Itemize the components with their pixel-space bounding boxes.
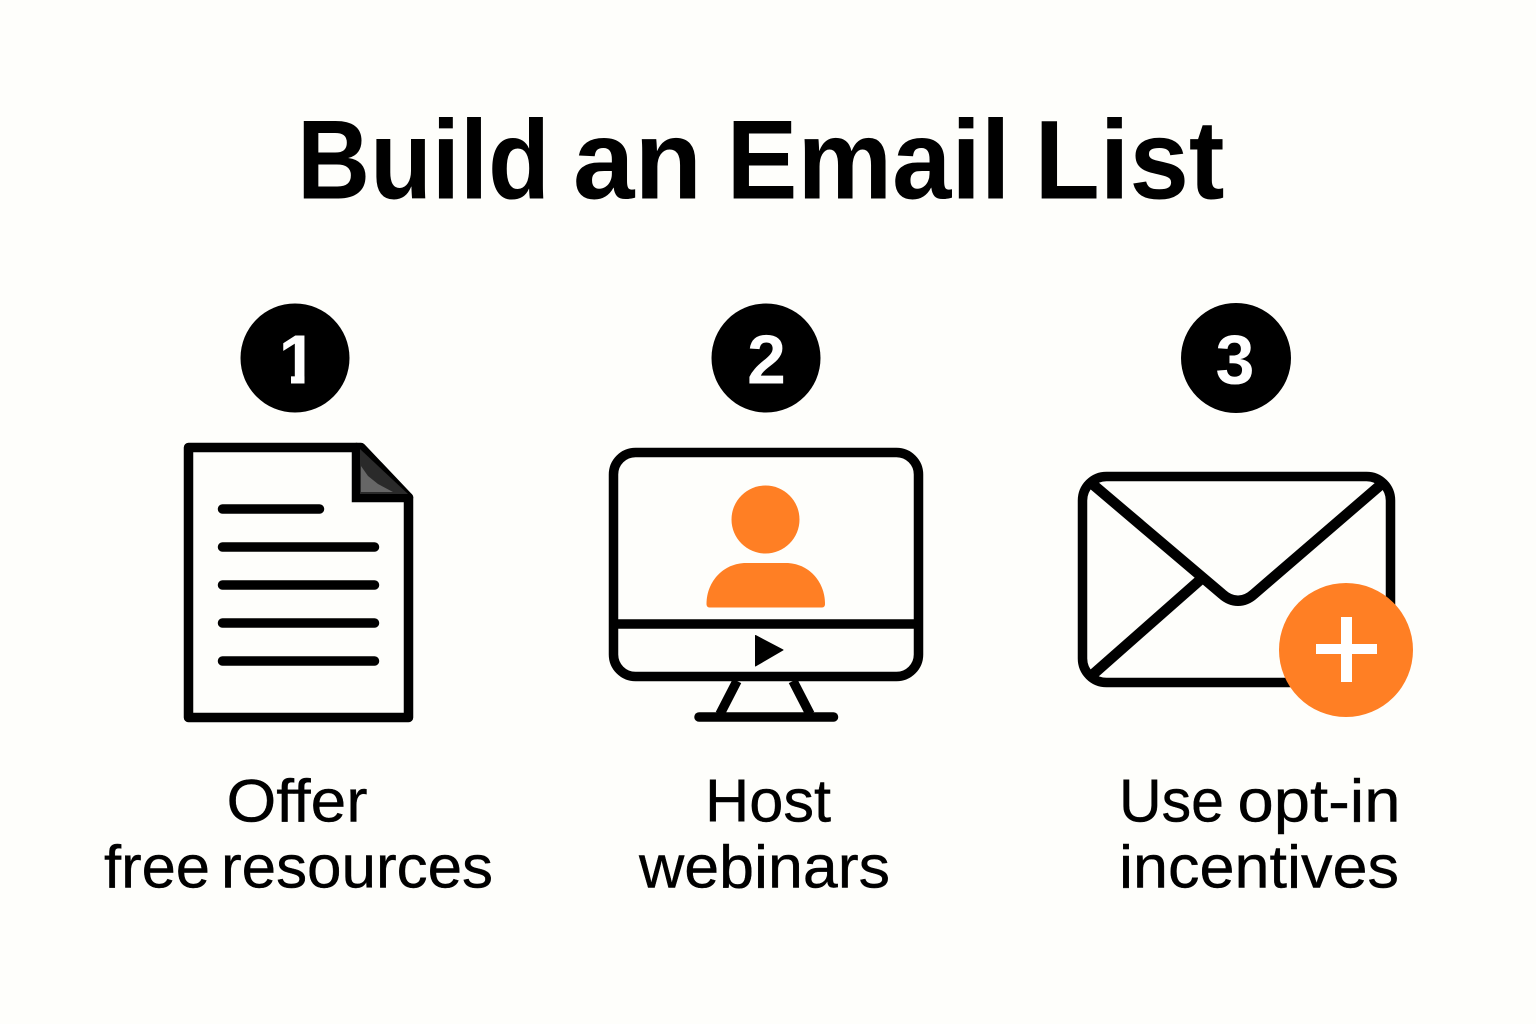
title: Email	[726, 98, 1010, 222]
label: host webinars: Host	[705, 768, 831, 834]
icon: monitor with presenter	[614, 452, 918, 717]
title: Build	[297, 98, 550, 222]
title: an	[573, 98, 702, 222]
number badge 2	[712, 304, 820, 412]
panel: step 1 offer free resources	[104, 304, 493, 900]
label: use opt-in incentives: Use	[1119, 768, 1224, 834]
number badge 3: 3	[1216, 320, 1254, 398]
number badge 3	[1181, 303, 1291, 413]
label: use opt-in incentives	[1119, 768, 1400, 900]
label: host webinars	[638, 768, 890, 900]
panel: step 3 use opt-in incentives	[1082, 303, 1413, 900]
number badge 2: 2	[747, 320, 786, 398]
number badge 1: 1	[278, 320, 317, 398]
title: List	[1034, 98, 1224, 222]
title	[297, 98, 1224, 222]
label: offer free resources: free	[104, 834, 210, 900]
icon: envelope with plus badge	[1082, 476, 1413, 717]
label: offer free resources	[104, 768, 493, 900]
label: use opt-in incentives: incentives	[1119, 834, 1399, 900]
label: offer free resources: resources	[221, 834, 493, 900]
label: offer free resources: Offer	[226, 768, 368, 834]
label: use opt-in incentives: opt-in	[1238, 768, 1400, 834]
panel: step 2 host webinars	[614, 304, 918, 900]
number badge 1	[240, 304, 350, 412]
icon: document	[188, 448, 408, 718]
label: host webinars: webinars	[638, 834, 890, 900]
